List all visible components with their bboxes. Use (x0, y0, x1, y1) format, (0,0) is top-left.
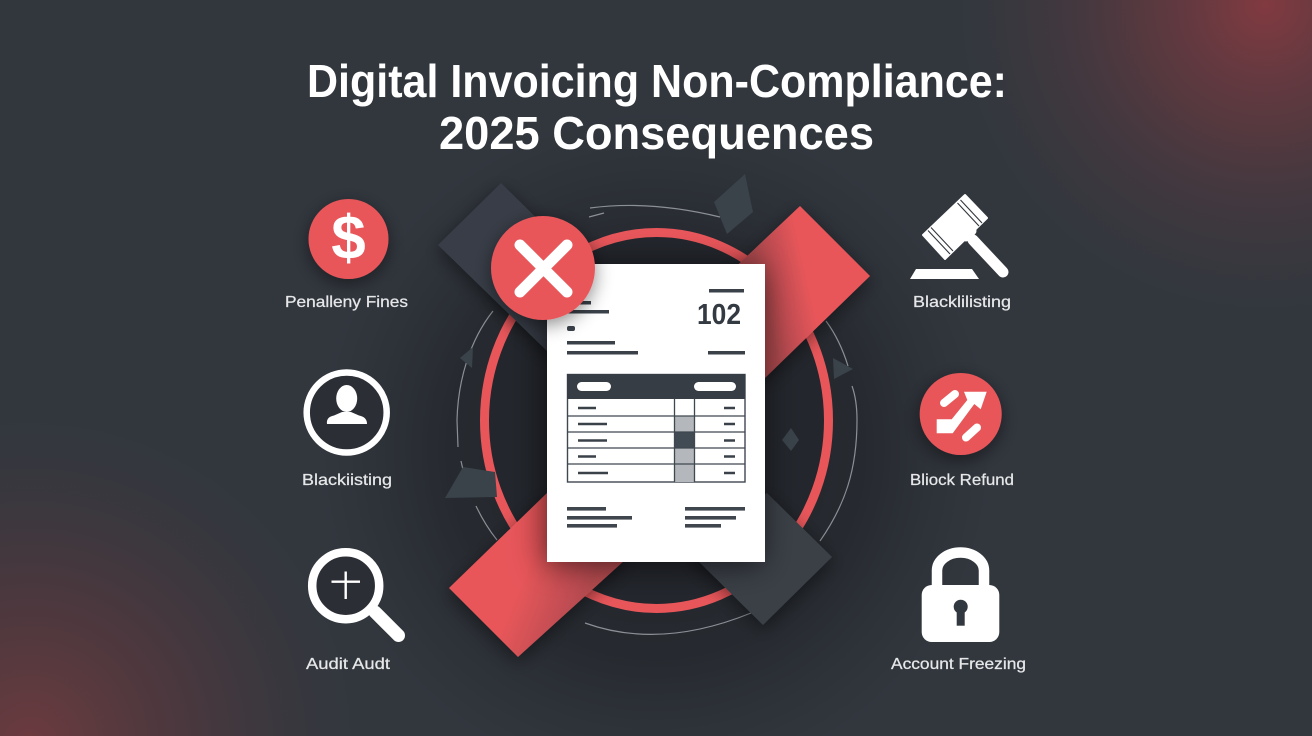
invoice footer bars (567, 507, 745, 528)
icon: person in circle (307, 372, 387, 452)
label: account freezing: Account Freezing (891, 656, 1026, 673)
title: Digital Invoicing Non-Compliance: (307, 55, 1007, 107)
diamond: dark bottom-right (690, 493, 832, 625)
label: blacklisting right: Blacklilisting (913, 294, 1011, 311)
label: penalty fines: Penalleny Fines (285, 294, 408, 311)
title: 2025 Consequences (439, 107, 874, 159)
small decorative shapes (445, 174, 853, 498)
icon: dollar penalty: $ (331, 204, 366, 273)
diamond: dark top-left (438, 183, 640, 352)
icon: red X badge (491, 216, 595, 320)
invoice table (567, 374, 745, 482)
label: block refund: Bliock Refund (910, 472, 1014, 489)
label: audit: Audit Audt (306, 656, 391, 673)
icon: gavel (910, 195, 1003, 279)
thin orbit arcs (457, 205, 857, 634)
red ring (484, 232, 828, 608)
diamond: red top-right (690, 206, 870, 378)
icon: dollar penalty (308, 199, 388, 279)
icon: magnifier (312, 552, 398, 636)
invoice header bars (567, 289, 745, 354)
invoice number: 102 (697, 299, 741, 331)
invoice document (547, 264, 765, 562)
diamond: red bottom-left (449, 493, 625, 657)
icon: blocked refund (920, 373, 1002, 455)
title (307, 55, 1007, 159)
label: blacklisting left: Blackiisting (302, 472, 392, 489)
icon: padlock (922, 552, 999, 642)
